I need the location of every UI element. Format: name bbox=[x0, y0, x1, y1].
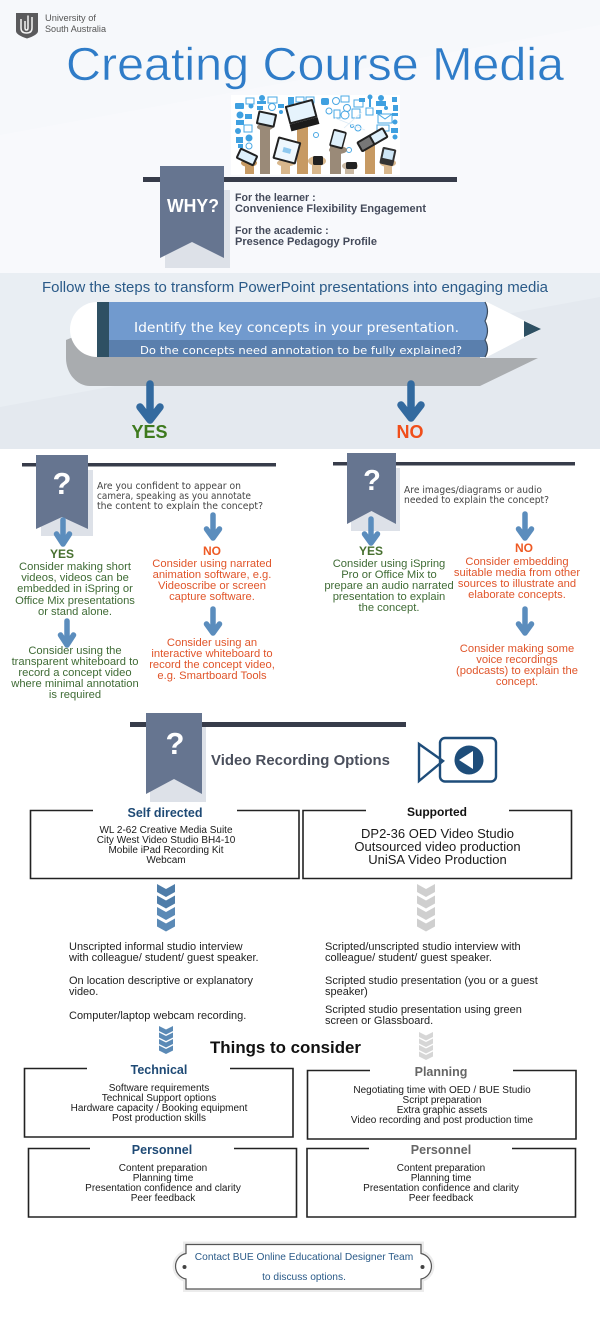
chevrons: self directed bbox=[157, 884, 175, 932]
text: reasons: Convenience Flexibility Engagement bbox=[235, 203, 426, 215]
arms: tan bbox=[241, 126, 396, 174]
text: self directed video types: video. bbox=[69, 986, 98, 998]
list: technical: Software requirements bbox=[109, 1083, 209, 1094]
text: reasons: For the learner : bbox=[235, 192, 316, 204]
title: Creating Course Media bbox=[66, 38, 564, 90]
arrow: right no second bbox=[518, 609, 532, 633]
list: supported: UniSA Video Production bbox=[368, 852, 507, 867]
text: left yes: embedded in iSpring or bbox=[17, 583, 133, 595]
text: left yes: or stand alone. bbox=[38, 606, 112, 618]
question: images or audio bbox=[404, 485, 549, 506]
question: confident on camera: camera, speaking as you annotate bbox=[97, 491, 251, 502]
list: supported: DP2-36 OED Video Studio bbox=[361, 826, 514, 841]
text: interactive whiteboard bbox=[149, 637, 275, 682]
list: self directed: Webcam bbox=[146, 855, 186, 866]
text: right no: suitable media from other bbox=[454, 567, 580, 579]
list: planning: Negotiating time with OED / BUE Studio bbox=[353, 1085, 531, 1096]
list: personnel left: Content preparation bbox=[119, 1163, 207, 1174]
question: confident on camera bbox=[97, 481, 263, 512]
list: personnel left bbox=[85, 1163, 241, 1204]
ribbon: question left: ? bbox=[53, 466, 71, 501]
logo: University of South Australia: South Australia bbox=[45, 24, 106, 34]
chevrons: small left bbox=[159, 1026, 173, 1054]
ribbon: why: WHY? bbox=[167, 196, 219, 216]
panel: personnel right: Personnel bbox=[411, 1143, 471, 1157]
text: left yes: YES bbox=[50, 547, 74, 561]
text: voice recordings: concept. bbox=[496, 676, 538, 688]
text: reasons bbox=[235, 192, 426, 248]
panel: planning: Planning bbox=[415, 1065, 467, 1079]
heading: things to consider: Things to consider bbox=[210, 1039, 362, 1057]
text: right yes: presentation to explain bbox=[333, 591, 445, 603]
heading: video recording options: Video Recording Options bbox=[211, 753, 390, 769]
arrow: right no bbox=[518, 514, 532, 538]
panel: supported: Supported bbox=[407, 805, 467, 819]
logo: University of South Australia: University of bbox=[45, 13, 97, 23]
text: whiteboard bbox=[10, 645, 139, 701]
text: supported video types: Scripted/unscripted studio interview with bbox=[325, 941, 521, 953]
chevrons: small right bbox=[419, 1032, 433, 1060]
text: right no: NO bbox=[515, 541, 533, 555]
text: supported video types: Scripted studio presentation using green bbox=[325, 1004, 522, 1016]
logo: University of South Australia bbox=[16, 13, 106, 38]
text: left yes: Consider making short bbox=[19, 561, 132, 573]
text: right yes: Pro or Office Mix to bbox=[341, 569, 437, 581]
text: whiteboard: transparent whiteboard to bbox=[12, 656, 138, 668]
ribbon: question left bbox=[36, 455, 93, 536]
text: right yes: Consider using iSpring bbox=[333, 558, 445, 570]
text: whiteboard: record a concept video bbox=[18, 667, 132, 679]
heading: follow the steps: Follow the steps to transform PowerPoint presentations into engaging media bbox=[42, 280, 548, 296]
icon cloud: social media symbols bbox=[235, 94, 398, 152]
panel: technical: Technical bbox=[131, 1063, 187, 1077]
text: voice recordings: (podcasts) to explain the bbox=[456, 665, 578, 677]
list: supported bbox=[354, 826, 521, 867]
panel: personnel right bbox=[307, 1143, 576, 1217]
text: voice recordings: Consider making some bbox=[460, 643, 574, 655]
panel: technical bbox=[24, 1063, 293, 1137]
text: interactive whiteboard: e.g. Smartboard Tools bbox=[157, 670, 267, 682]
arms bbox=[257, 124, 358, 174]
text: self directed video types: On location descriptive or explanatory bbox=[69, 975, 254, 987]
list: personnel right: Presentation confidence and clarity bbox=[363, 1183, 519, 1194]
text: left no: animation software, e.g. bbox=[153, 569, 271, 581]
text: right no bbox=[454, 541, 580, 601]
panel: left decision bbox=[10, 455, 276, 701]
panel: video recording options header bbox=[130, 713, 496, 802]
text: self directed video types: with colleague/ student/ guest speaker. bbox=[68, 952, 259, 964]
list: technical bbox=[71, 1083, 248, 1124]
list: personnel right: Planning time bbox=[411, 1173, 472, 1184]
text: left yes: videos, videos can be bbox=[21, 572, 129, 584]
list: supported: Outsourced video production bbox=[354, 839, 521, 854]
list: planning bbox=[351, 1085, 534, 1126]
text: left no bbox=[152, 544, 272, 603]
text: right yes: YES bbox=[359, 544, 383, 558]
text: left no: Videoscribe or screen bbox=[158, 580, 266, 592]
panel: supported bbox=[303, 805, 572, 878]
question: images or audio: Are images/diagrams or audio bbox=[404, 485, 542, 496]
list: self directed: City West Video Studio BH4-10 bbox=[97, 835, 236, 846]
illustration: hands holding devices bbox=[231, 94, 400, 175]
text: left yes bbox=[15, 547, 135, 618]
ribbon: question right: ? bbox=[363, 465, 381, 497]
list: planning: Extra graphic assets bbox=[397, 1105, 487, 1116]
list: technical: Post production skills bbox=[112, 1113, 206, 1124]
pencil banner: Do the concepts need annotation to be fully explained? bbox=[140, 344, 462, 357]
list: personnel right bbox=[363, 1163, 519, 1204]
list: personnel right: Content preparation bbox=[397, 1163, 485, 1174]
panel: self directed: Self directed bbox=[127, 806, 203, 820]
text: right yes: prepare an audio narrated bbox=[324, 580, 454, 592]
text: right no: sources to illustrate and bbox=[458, 578, 576, 590]
question: confident on camera: Are you confident to appear on bbox=[97, 481, 241, 492]
panel: why bbox=[143, 166, 457, 268]
text: right no: Consider embedding bbox=[465, 556, 569, 568]
text: interactive whiteboard: record the concept video, bbox=[149, 659, 275, 671]
text: supported video types: speaker) bbox=[325, 986, 368, 998]
icon: video camera bbox=[419, 738, 496, 782]
list: self directed: Mobile iPad Recording Kit bbox=[108, 845, 224, 856]
text: voice recordings bbox=[456, 643, 578, 688]
question: images or audio: needed to explain the concept? bbox=[404, 495, 549, 506]
text: left no: capture software. bbox=[169, 591, 255, 603]
list: self directed: WL 2-62 Creative Media Suite bbox=[99, 825, 233, 836]
list: personnel right: Peer feedback bbox=[409, 1193, 474, 1204]
text: supported video types: Scripted studio presentation (you or a guest bbox=[325, 975, 538, 987]
ribbon: video question bbox=[146, 713, 206, 802]
callout: contact bbox=[176, 1244, 431, 1289]
text: right no: elaborate concepts. bbox=[468, 589, 566, 601]
text: voice recordings: voice recordings bbox=[476, 654, 558, 666]
list: personnel left: Presentation confidence and clarity bbox=[85, 1183, 241, 1194]
text: right yes: the concept. bbox=[359, 602, 419, 614]
text: whiteboard: where minimal annotation bbox=[10, 678, 139, 690]
list: planning: Video recording and post production time bbox=[351, 1115, 534, 1126]
text: whiteboard: Consider using the bbox=[28, 645, 122, 657]
arrow: yes bbox=[140, 384, 160, 420]
text: self directed video types: Computer/laptop webcam recording. bbox=[69, 1010, 246, 1022]
ribbon: video question: ? bbox=[166, 726, 184, 761]
text: supported video types bbox=[325, 941, 538, 1027]
text: supported video types: colleague/ student/ guest speaker. bbox=[325, 952, 492, 964]
pencil banner bbox=[66, 302, 541, 386]
callout: contact: to discuss options. bbox=[262, 1272, 346, 1283]
label: no: NO bbox=[396, 422, 424, 442]
ribbon: why bbox=[160, 166, 230, 268]
text: whiteboard: is required bbox=[49, 689, 101, 701]
list: self directed bbox=[97, 825, 236, 866]
devices bbox=[235, 99, 397, 169]
panel: personnel left bbox=[28, 1143, 296, 1217]
text: reasons: Presence Pedagogy Profile bbox=[235, 236, 377, 248]
list: planning: Script preparation bbox=[403, 1095, 481, 1106]
callout: contact: Contact BUE Online Educational Designer Team bbox=[195, 1252, 413, 1263]
text: interactive whiteboard: interactive whiteboard to bbox=[151, 648, 273, 660]
list: personnel left: Peer feedback bbox=[131, 1193, 196, 1204]
list: technical: Technical Support options bbox=[102, 1093, 216, 1104]
arrow: left yes bbox=[56, 520, 70, 544]
list: technical: Hardware capacity / Booking equipment bbox=[71, 1103, 248, 1114]
panel: right decision bbox=[324, 453, 580, 688]
text: right yes bbox=[324, 544, 454, 614]
list: personnel left: Planning time bbox=[133, 1173, 194, 1184]
text: supported video types: screen or Glassboard. bbox=[325, 1015, 433, 1027]
pencil banner: Identify the key concepts in your presentation. bbox=[134, 321, 459, 336]
text: self directed video types bbox=[68, 941, 259, 1022]
ribbon: question right bbox=[347, 453, 400, 531]
text: interactive whiteboard: Consider using an bbox=[167, 637, 257, 649]
arrow: no bbox=[401, 384, 421, 418]
label: yes: YES bbox=[131, 422, 168, 442]
text: left no: NO bbox=[203, 544, 221, 558]
question: confident on camera: the content to explain the concept? bbox=[97, 501, 263, 512]
arrow: left no second bbox=[206, 609, 220, 633]
text: self directed video types: Unscripted informal studio interview bbox=[69, 941, 243, 953]
arrow: left no bbox=[206, 515, 220, 538]
arrow: left yes second bbox=[60, 621, 74, 645]
panel: personnel left: Personnel bbox=[132, 1143, 192, 1157]
arrow: right yes bbox=[364, 519, 378, 543]
text: reasons: For the academic : bbox=[235, 225, 329, 237]
text: left yes: Office Mix presentations bbox=[15, 595, 135, 607]
panel: self directed bbox=[30, 806, 299, 878]
text: left no: Consider using narrated bbox=[152, 558, 272, 570]
panel: planning bbox=[308, 1065, 576, 1139]
chevrons: supported bbox=[417, 884, 435, 932]
